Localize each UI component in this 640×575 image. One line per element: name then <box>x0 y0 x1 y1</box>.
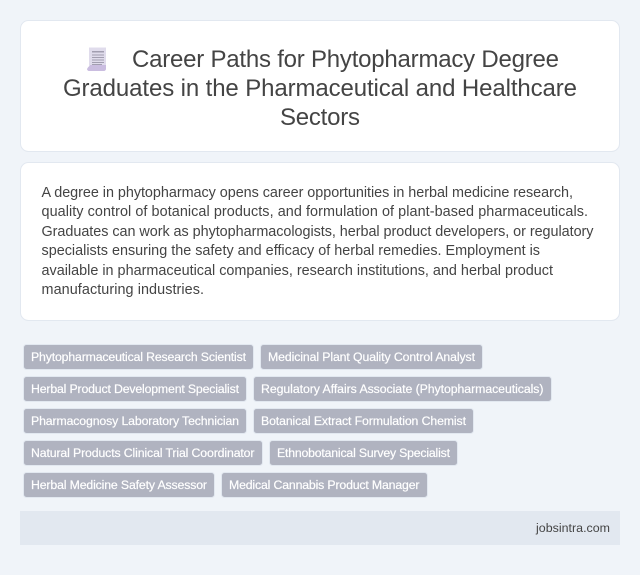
description text: specialists ensuring the safety and efficacy of herbal remedies. Employment is <box>42 243 540 259</box>
panel: description <box>20 162 620 320</box>
tag: Medicinal Plant Quality Control Analyst <box>260 344 482 370</box>
description text: Graduates can work as phytopharmacologists, herbal product developers, or regulatory <box>42 224 594 240</box>
tag: Botanical Extract Formulation Chemist: Botanical Extract Formulation Chemist <box>261 414 467 428</box>
description text: manufacturing industries. <box>42 282 204 298</box>
career tags <box>24 344 552 498</box>
title <box>63 46 577 131</box>
tag: Herbal Medicine Safety Assessor <box>24 472 214 498</box>
tag: Phytopharmaceutical Research Scientist: Phytopharmaceutical Research Scientist <box>31 350 247 364</box>
tag: Medical Cannabis Product Manager: Medical Cannabis Product Manager <box>229 478 420 492</box>
tag: Herbal Medicine Safety Assessor: Herbal Medicine Safety Assessor <box>31 478 207 492</box>
tag: Phytopharmaceutical Research Scientist <box>24 344 254 370</box>
title: Sectors <box>280 104 360 131</box>
tag: Regulatory Affairs Associate <box>254 376 552 402</box>
tag: Ethnobotanical Survey Specialist <box>270 440 458 466</box>
tag: Medical Cannabis Product Manager <box>222 472 428 498</box>
icon: document scroll <box>87 48 106 71</box>
tag: Herbal Product Development Specialist: Herbal Product Development Specialist <box>31 382 240 396</box>
title: Career Paths for Phytopharmacy Degree <box>132 46 559 73</box>
tag: Pharmacognosy Laboratory Technician: Pharmacognosy Laboratory Technician <box>31 414 239 428</box>
tag: Natural Products Clinical Trial Coordinator <box>24 440 262 466</box>
description text: available in pharmaceutical companies, research institutions, and herbal product <box>42 263 553 279</box>
description text: quality control of botanical products, and formulation of plant-based pharmaceuticals. <box>42 204 588 220</box>
tag: Botanical Extract Formulation Chemist <box>254 408 474 434</box>
tag: Regulatory Affairs Associate: Regulatory Affairs Associate (Phytopharmaceuticals) <box>261 382 544 396</box>
title: Graduates in the Pharmaceutical and Healthcare <box>63 75 577 102</box>
footer <box>20 511 620 545</box>
panel: title card <box>20 20 620 152</box>
tag: Pharmacognosy Laboratory Technician <box>24 408 246 434</box>
description text <box>42 185 594 298</box>
description text: A degree in phytopharmacy opens career opportunities in herbal medicine research, <box>42 185 573 201</box>
tag: Ethnobotanical Survey Specialist: Ethnobotanical Survey Specialist <box>277 446 451 460</box>
footer: jobsintra.com <box>535 521 610 535</box>
tag: Herbal Product Development Specialist <box>24 376 246 402</box>
tag: Natural Products Clinical Trial Coordinator: Natural Products Clinical Trial Coordinator <box>31 446 254 460</box>
tag: Medicinal Plant Quality Control Analyst: Medicinal Plant Quality Control Analyst <box>268 350 476 364</box>
